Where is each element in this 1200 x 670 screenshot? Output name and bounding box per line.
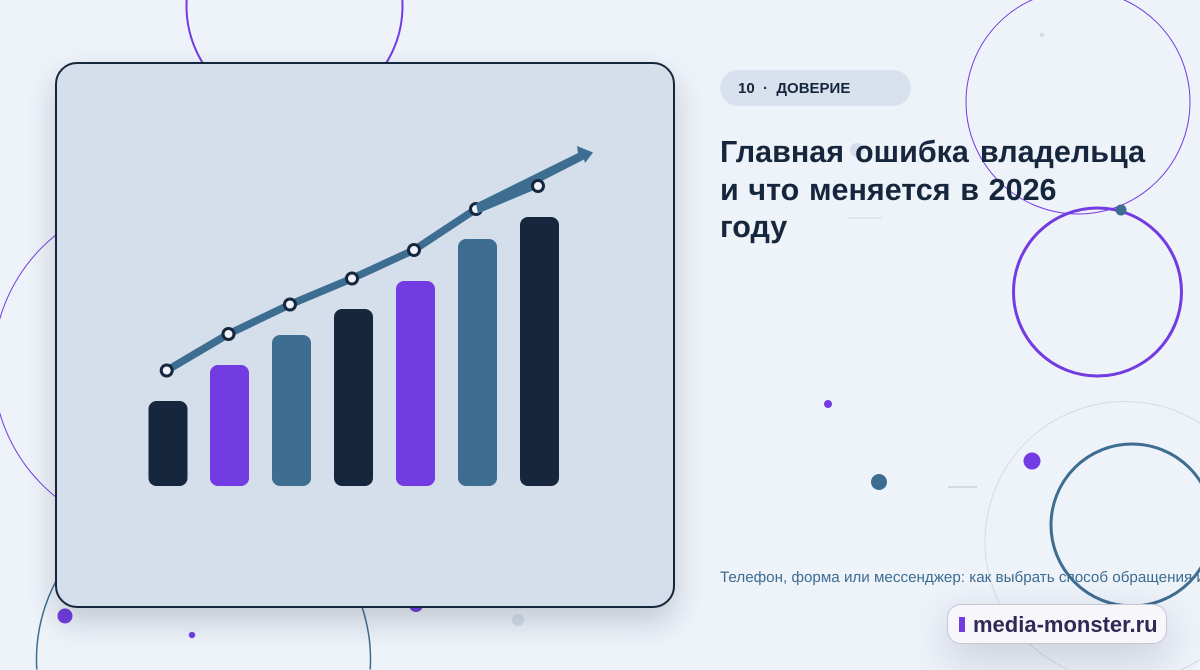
dot: bottom grey	[512, 614, 524, 626]
panel: illustration card	[55, 62, 675, 608]
chart: rising bars with trend line	[148, 146, 593, 486]
badge: section label: 10 · ДОВЕРИЕ	[738, 80, 850, 97]
title: году	[720, 210, 787, 244]
dot: tiny grey top right	[1040, 33, 1044, 37]
circle: top centre purple ring	[186, 0, 402, 114]
dot: blue on purple ring	[1116, 204, 1126, 216]
circle: left thin purple ring	[0, 198, 329, 534]
title: и что меняется в 2026	[720, 172, 1057, 206]
trend line with points	[161, 146, 593, 376]
circle: right bold purple ring	[1014, 208, 1182, 376]
dot: small purple	[824, 400, 832, 408]
bars	[148, 217, 559, 486]
dot: medium blue	[871, 474, 887, 490]
circle: bottom right thin grey ring	[985, 401, 1200, 670]
dot: bottom small purple	[189, 632, 195, 638]
title: Главная ошибка владельца	[720, 135, 1145, 169]
title	[720, 135, 1146, 244]
brand tag: media-monster.ru	[973, 612, 1158, 637]
circle: bottom left blue ring	[37, 492, 371, 670]
dot: purple partly behind card	[409, 598, 423, 612]
brand tag	[947, 604, 1167, 644]
dot: medium purple	[1024, 452, 1040, 470]
dot: light behind title	[850, 143, 864, 157]
badge: section label	[720, 70, 911, 106]
circle: top right thin purple ring	[966, 0, 1190, 214]
circle: bottom right blue ring	[1051, 444, 1200, 606]
dot: bottom left purple	[58, 608, 72, 624]
